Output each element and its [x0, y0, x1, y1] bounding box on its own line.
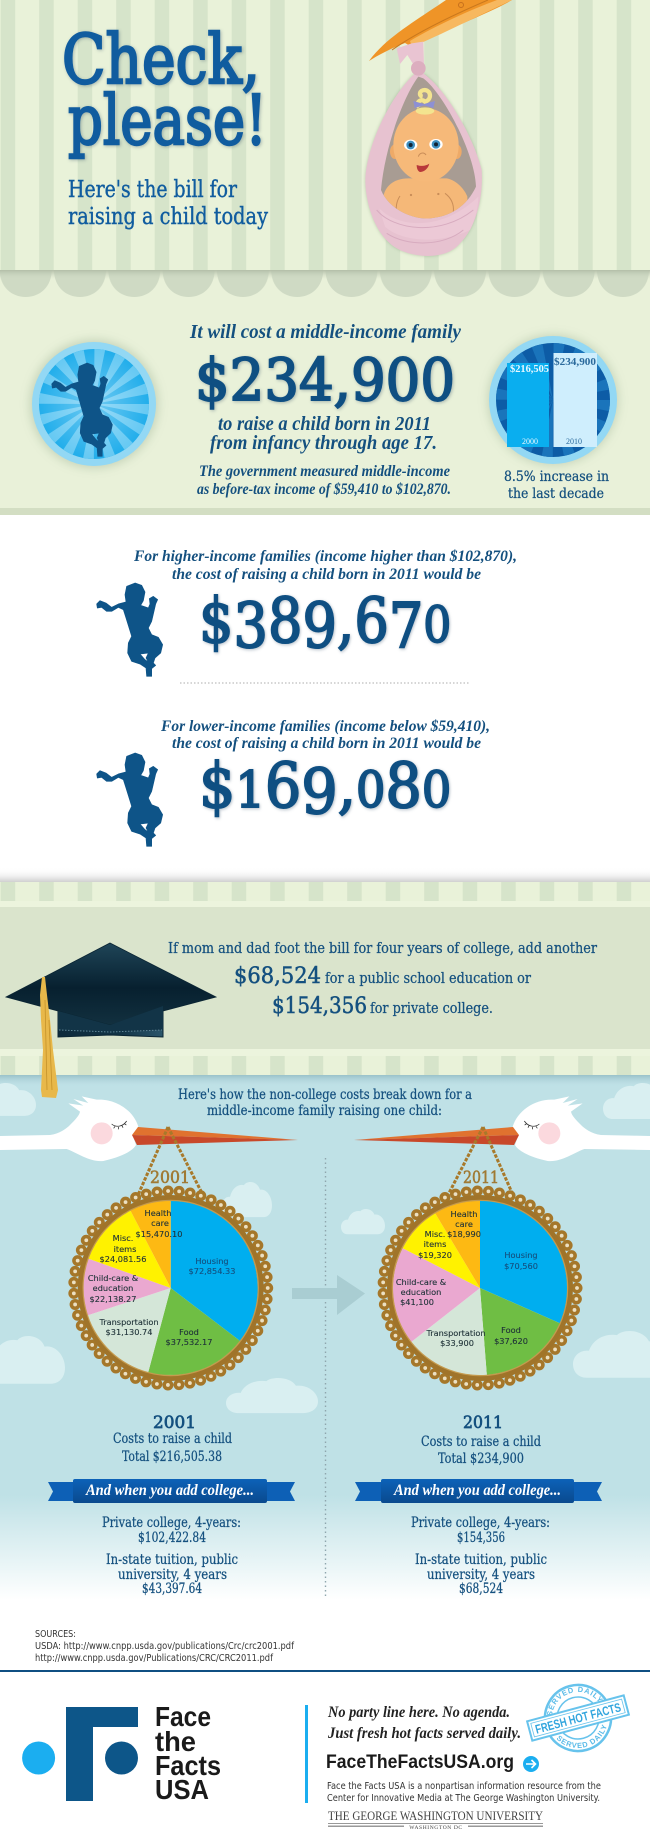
text: headline cost: The government measured middle-income [199, 463, 450, 480]
intro text: Here's how the non-college costs break down for a [178, 1087, 472, 1103]
figure: $389,670: 6 [354, 585, 389, 657]
figure: $389,670: 7 [389, 590, 423, 662]
column: 2001 totals and college: In-state tuition, public [106, 1552, 238, 1568]
icon: baby silhouette [97, 753, 163, 846]
text: headline cost: $234,900 [195, 346, 455, 414]
icon: stork beak [369, 0, 512, 61]
divider: vertical dotted [324, 1158, 326, 1598]
text: college add-on [168, 941, 597, 1019]
text: increase note: the last decade [508, 486, 604, 502]
footer tagline and description: FaceTheFactsUSA.org [326, 1752, 514, 1773]
stamp: fresh hot facts: SERVED DAILY [547, 1686, 603, 1715]
text: headline cost [189, 322, 461, 498]
pie labels: Housing [195, 1256, 229, 1266]
column: 2011 totals and college: Costs to raise a child [421, 1434, 541, 1450]
logo: Face the Facts USA: USA [155, 1774, 209, 1805]
pie labels: Transportation [425, 1328, 486, 1338]
ribbon banner: And when you add college... [85, 1482, 254, 1499]
pie labels: education [401, 1287, 441, 1297]
ribbon banner [48, 1479, 295, 1503]
intro text [178, 1087, 472, 1119]
panel: college costs [0, 868, 650, 1075]
panel: higher-income cost: For higher-income families (income higher than $102,870), [133, 548, 517, 565]
panel: lower-income cost [97, 718, 490, 846]
pie chart: 2001 [74, 1168, 268, 1385]
footer tagline and description [326, 1704, 601, 1804]
arrow [292, 1275, 365, 1315]
pie chart: 2011 [383, 1168, 577, 1385]
pie chart: 2011: 2011 [463, 1168, 499, 1188]
column: 2001 totals and college [48, 1413, 295, 1597]
pie labels: $22,138.27 [90, 1294, 136, 1304]
figure: $169,080: 080 [356, 751, 451, 823]
stamp: fresh hot facts [526, 1684, 630, 1752]
text: headline cost: as before-tax income of $59,410 to $102,870. [197, 481, 451, 498]
pie labels: $72,854.33 [189, 1266, 235, 1276]
sources: USDA: http://www.cnpp.usda.gov/publications/Crc/crc2001.pdf [35, 1641, 294, 1652]
figure: $389,670: 3 [234, 590, 268, 662]
figure: $389,670: 9 [303, 590, 337, 662]
panel: lower-income cost: For lower-income families (income below $59,410), [160, 718, 490, 735]
panel: middle-income cost [0, 270, 650, 515]
pie labels: education [93, 1283, 133, 1293]
stamp: fresh hot facts: FRESH HOT FACTS [534, 1700, 622, 1737]
column: 2001 totals and college: university, 4 years [118, 1567, 227, 1583]
pie labels: Child-care & [88, 1273, 139, 1283]
pie labels: Transportation [98, 1317, 159, 1327]
pie chart: 2001: 2001 [150, 1168, 190, 1188]
pie labels: Housing [504, 1250, 538, 1260]
column: 2011 totals and college: 2011 [463, 1413, 503, 1433]
column: 2011 totals and college: Private college, 4-years: [411, 1515, 550, 1531]
logo: Face the Facts USA: Face [155, 1701, 211, 1732]
chain [138, 1127, 203, 1195]
column: 2001 totals and college: Costs to raise a child [113, 1431, 232, 1447]
footer tagline and description: Face the Facts USA is a nonpartisan information resource from the [327, 1781, 601, 1792]
pie labels: Health [145, 1208, 171, 1218]
figure: $389,670: , [337, 585, 354, 657]
pie labels: care [455, 1219, 473, 1229]
intro text: middle-income family raising one child: [207, 1103, 442, 1119]
logo: Face the Facts USA [22, 1701, 221, 1805]
sources [35, 1629, 294, 1664]
column: 2001 totals and college: 2001 [153, 1413, 196, 1433]
pie labels: Misc. [425, 1229, 445, 1239]
pie labels [88, 1208, 235, 1347]
pie labels: $41,100 [400, 1297, 434, 1307]
icon: left stork [0, 1096, 298, 1195]
chart: 2000 vs 2010 bars in circle: 2000 [522, 437, 538, 446]
pie labels: items [114, 1244, 136, 1254]
logo: Face the Facts USA: the [155, 1726, 196, 1757]
text: college add-on: $154,356 [272, 994, 367, 1019]
pie labels: items [424, 1239, 446, 1249]
pie labels: $31,130.74 [106, 1327, 152, 1337]
footer tagline and description: Just fresh hot facts served daily. [327, 1725, 521, 1742]
icon: baby in pink sling [365, 42, 482, 256]
icon: arrow button [523, 1756, 539, 1772]
column: 2011 totals and college [355, 1413, 602, 1597]
chain [448, 1127, 513, 1195]
footer rule [0, 1670, 650, 1672]
pie labels [396, 1209, 538, 1348]
stamp: fresh hot facts: SERVED DAILY [557, 1724, 606, 1748]
figure: $389,670: 8 [268, 585, 303, 657]
pie labels: $19,320 [418, 1250, 452, 1260]
panel: header with striped background [0, 0, 650, 270]
clouds [0, 1083, 650, 1413]
panel: lower-income cost: the cost of raising a child born in 2011 would be [172, 735, 481, 752]
column: 2011 totals and college: Total $234,900 [438, 1451, 524, 1467]
pie labels: $24,081.56 [100, 1254, 146, 1264]
pie labels: $15,470.10 [136, 1229, 182, 1239]
sources: http://www.cnpp.usda.gov/Publications/CRC/CRC2011.pdf [35, 1653, 273, 1664]
column: 2001 totals and college: Total $216,505.38 [122, 1449, 222, 1465]
figure: $169,080: 9 [301, 757, 338, 829]
footer tagline and description: Center for Innovative Media at The George Washington University. [327, 1793, 600, 1804]
column: 2001 totals and college: Private college, 4-years: [102, 1515, 241, 1531]
figure: $169,080: , [338, 751, 356, 823]
chart: 2000 vs 2010 bars in circle: $216,505 [510, 364, 549, 375]
text: headline cost: It will cost a middle-income family [189, 322, 461, 343]
text: increase note [504, 469, 609, 502]
ribbon banner [355, 1479, 602, 1503]
pie labels: $70,560 [504, 1261, 538, 1271]
logo: Face the Facts USA: Facts [155, 1750, 221, 1781]
subtitle: Here's the bill for [68, 177, 237, 203]
text: college add-on: for a public school education or [325, 971, 531, 987]
figure: $389,670: 0 [423, 596, 451, 655]
text: college add-on: If mom and dad foot the bill for four years of college, add another [168, 941, 597, 957]
panel: sky breakdown [0, 1075, 650, 1600]
text: headline cost: to raise a child born in 2011 [218, 414, 431, 435]
chart: 2000 vs 2010 bars in circle: $234,900 [554, 357, 596, 368]
chart: 2000 vs 2010 bars in circle [488, 335, 618, 465]
figure: $389,670: $ [199, 585, 234, 657]
panel: higher-income cost [97, 548, 517, 676]
icon: baby silhouette [97, 583, 163, 676]
text: college add-on: $68,524 [234, 964, 321, 989]
figure: $169,080: $16 [199, 751, 301, 823]
column: 2001 totals and college: $43,397.64 [142, 1581, 202, 1597]
text: headline cost: from infancy through age 17. [210, 433, 437, 454]
pie labels: Food [501, 1325, 521, 1335]
panel: higher-income cost: the cost of raising a child born in 2011 would be [172, 566, 481, 583]
icon: graduation cap with tassel [6, 943, 216, 1098]
logo: The George Washington University: WASHINGTON DC [409, 1825, 463, 1831]
footer accent bar [305, 1705, 308, 1803]
ribbon banner: And when you add college... [393, 1482, 561, 1499]
text: increase note: 8.5% increase in [504, 469, 609, 485]
column: 2001 totals and college: $102,422.84 [138, 1530, 206, 1546]
footer tagline and description: No party line here. No agenda. [327, 1704, 510, 1721]
pie labels: $37,532.17 [166, 1337, 212, 1347]
pie labels: $37,620 [494, 1336, 528, 1346]
title: Check, please!: please! [68, 82, 267, 161]
chart: 2000 vs 2010 bars in circle: 2010 [566, 437, 582, 446]
divider [180, 682, 470, 684]
subtitle: raising a child today [68, 204, 268, 230]
subtitle [68, 177, 268, 230]
title: Check, please!: Check, [62, 21, 260, 100]
pie labels: Health [451, 1209, 477, 1219]
title: Check, please! [62, 21, 267, 161]
column: 2011 totals and college: $68,524 [459, 1581, 503, 1597]
pie labels: Child-care & [396, 1277, 447, 1287]
pie labels: $18,990 [447, 1229, 481, 1239]
icon: right stork [354, 1096, 650, 1195]
pie labels: Food [179, 1327, 199, 1337]
pie labels: Misc. [113, 1233, 133, 1243]
pie labels: care [151, 1218, 169, 1228]
column: 2011 totals and college: $154,356 [457, 1530, 505, 1546]
column: 2011 totals and college: In-state tuition, public [415, 1552, 547, 1568]
column: 2011 totals and college: university, 4 years [427, 1567, 535, 1583]
logo: The George Washington University [328, 1809, 543, 1831]
icon: baby in blue sunburst circle [30, 340, 158, 468]
sources: SOURCES: [35, 1629, 76, 1640]
logo: The George Washington University: THE GEORGE WASHINGTON UNIVERSITY [328, 1809, 543, 1823]
pie labels: $33,900 [440, 1338, 474, 1348]
text: college add-on: for private college. [370, 1001, 493, 1017]
